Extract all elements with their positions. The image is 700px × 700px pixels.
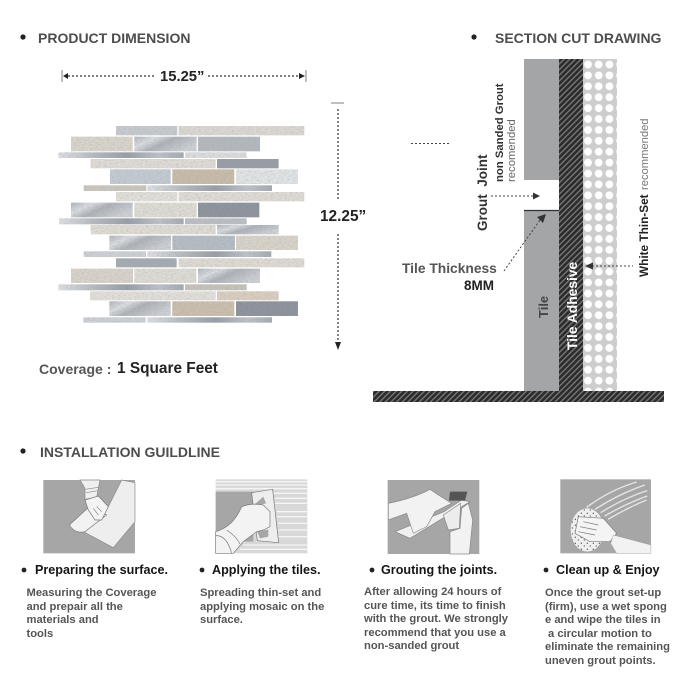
step 4: clean up and enjoy: e and wipe the tiles in <box>545 614 661 626</box>
coverage label <box>39 360 218 377</box>
heading: section cut drawing: SECTION CUT DRAWING <box>495 30 662 46</box>
step 1: preparing the surface: Measuring the Coverage <box>26 587 156 599</box>
floor <box>373 391 664 402</box>
tile thickness label <box>402 261 497 293</box>
coverage label: Coverage : <box>39 361 111 377</box>
step 3: grouting the joints: Grouting the joints. <box>381 563 497 577</box>
icon: grouting joints <box>388 480 479 554</box>
heading: installation guideline: INSTALLATION GUILDLINE <box>40 444 220 460</box>
tile thickness arrow <box>504 220 540 271</box>
step 4: clean up and enjoy: Once the grout set-up <box>545 587 661 599</box>
grout joint arrow <box>491 195 534 197</box>
step 4: clean up and enjoy: eliminate the remaining <box>545 641 670 653</box>
step 4: clean up and enjoy: (firm), use a wet spong <box>545 601 667 613</box>
step 1: preparing the surface: and prepair all the <box>26 601 123 613</box>
thin-set arrow <box>592 265 633 267</box>
step 4: clean up and enjoy: a circular motion to <box>548 628 652 640</box>
step 4: clean up and enjoy <box>544 563 670 667</box>
step 1: preparing the surface: tools <box>26 628 53 640</box>
tile label: Tile <box>536 296 551 318</box>
white thin-set label: recommended <box>639 118 651 190</box>
step 2: applying the tiles <box>200 563 324 626</box>
tile thickness label: Tile Thickness <box>402 261 497 276</box>
icon: spreading thin-set <box>216 479 307 553</box>
tile adhesive layer <box>559 59 583 391</box>
tile top edge <box>524 210 559 212</box>
height dimension 12.25 inches <box>320 103 366 350</box>
width dimension 15.25 inches <box>62 69 306 85</box>
step 2: applying the tiles: surface. <box>200 614 243 626</box>
upper tile <box>524 59 559 180</box>
white thin-set label: White Thin-Set <box>637 194 651 277</box>
step 1: preparing the surface <box>22 563 168 640</box>
mosaic tile sheet <box>58 126 304 323</box>
step 2: applying the tiles: applying mosaic on the <box>200 601 324 613</box>
tile thickness label: 8MM <box>464 278 494 293</box>
grout joint label: non Sanded Grout <box>494 83 506 182</box>
white thin-set label <box>637 118 651 277</box>
step 3: grouting the joints: cure time, its time to finish <box>364 600 506 612</box>
step 4: clean up and enjoy: Clean up & Enjoy <box>556 563 660 577</box>
step 1: preparing the surface: Preparing the surface. <box>35 563 168 577</box>
coverage label: 1 Square Feet <box>117 360 218 377</box>
step 3: grouting the joints <box>363 563 509 652</box>
width dimension 15.25 inches: 15.25” <box>160 69 204 85</box>
step 2: applying the tiles: Applying the tiles. <box>212 563 320 577</box>
icon: unrolling mosaic <box>43 480 135 553</box>
step 3: grouting the joints: non-sanded grout <box>364 640 459 652</box>
step 3: grouting the joints: After allowing 24 hours of <box>364 586 502 598</box>
section cut diagram <box>373 59 664 402</box>
grout joint label: Grout Joint <box>475 154 490 231</box>
heading: product dimension: PRODUCT DIMENSION <box>38 30 190 46</box>
grout joint label: recomended <box>506 119 518 182</box>
icon: clean up <box>560 479 651 553</box>
step 4: clean up and enjoy: uneven grout points. <box>545 655 656 667</box>
lower tile <box>524 210 559 391</box>
grout joint label <box>475 83 518 231</box>
height dimension 12.25 inches: 12.25” <box>320 208 366 225</box>
step 3: grouting the joints: with the grout. We strongly <box>363 613 509 625</box>
step 2: applying the tiles: Spreading thin-set and <box>200 587 321 599</box>
step 1: preparing the surface: materials and <box>26 614 99 626</box>
tile adhesive label: Tile Adhesive <box>565 261 580 350</box>
white thin-set dotted layer <box>583 59 617 391</box>
short dotted line <box>411 142 449 144</box>
step 3: grouting the joints: recommend that you use a <box>364 627 507 639</box>
